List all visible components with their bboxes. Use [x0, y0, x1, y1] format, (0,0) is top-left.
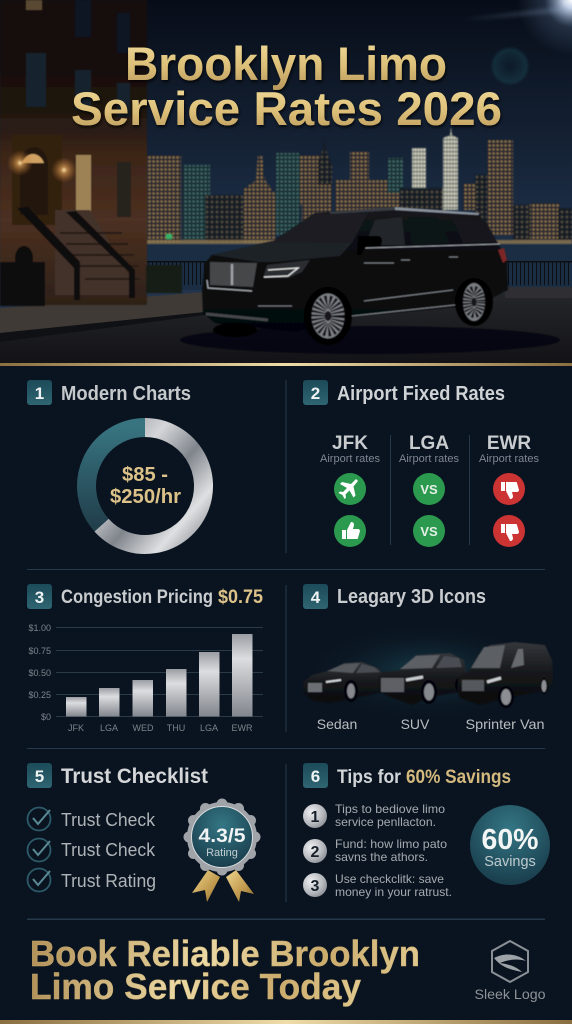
badge 1: 1: [35, 384, 44, 403]
icon: vs LGA bottom: [413, 515, 445, 547]
bar chart: THU: [167, 723, 185, 733]
rating rosette badge: Rating: [206, 847, 238, 859]
tip 3: Use checkclitk: save: [335, 872, 444, 886]
heading: Tips for: [337, 766, 401, 788]
panel 2: airport fixed rates: [303, 380, 539, 547]
icon: sprinter van: [457, 642, 553, 708]
badge 2: 2: [311, 384, 320, 403]
icon: vs LGA bottom: VS: [420, 524, 438, 539]
heading: Congestion Pricing: [61, 586, 213, 608]
panel 6: tips: [303, 763, 550, 899]
bar chart: $1.00: [28, 623, 51, 633]
bar chart: $0.75: [28, 646, 51, 656]
badge 4: [303, 584, 328, 609]
tip 3: money in your ratrust.: [335, 885, 452, 899]
badge 5: [27, 763, 52, 788]
badge 6: 6: [311, 767, 320, 786]
bottom gold bar: [0, 1020, 572, 1024]
heading: Airport Fixed Rates: [337, 383, 505, 405]
airport labels: Airport rates: [479, 453, 539, 465]
savings circle: Savings: [484, 854, 536, 870]
badge 3: 3: [35, 588, 44, 607]
checklist: [28, 808, 156, 892]
bar chart: JFK: [68, 723, 84, 733]
icon: thumbs up: [334, 515, 366, 547]
heading: Trust Checklist: [61, 765, 208, 788]
airport labels: LGA: [409, 433, 449, 454]
heading: [337, 766, 511, 788]
gold divider under hero: [0, 363, 572, 366]
airport labels: Airport rates: [320, 453, 380, 465]
vehicle labels: [317, 716, 544, 732]
donut chart: $250/hr: [110, 486, 181, 508]
panel 4: vehicle icons: [300, 584, 553, 732]
call to action: [30, 933, 420, 1007]
vehicle labels: Sprinter Van: [466, 716, 544, 732]
heading: Leagary 3D Icons: [337, 586, 486, 608]
tip 2: savns the athors.: [335, 850, 428, 864]
bar chart: [28, 623, 263, 733]
panel 5: trust checklist: [27, 763, 260, 902]
donut chart: $85 -: [122, 464, 168, 486]
icon: SUV: [378, 653, 468, 705]
tip 1: [303, 802, 445, 829]
airport labels: Airport rates: [399, 453, 459, 465]
tip 2: [303, 837, 447, 864]
title: Brooklyn Limo: [125, 37, 447, 90]
savings circle: [470, 805, 550, 885]
checklist: Trust Check: [61, 810, 156, 830]
badge 5: 5: [35, 767, 44, 786]
bar chart: LGA: [200, 723, 218, 733]
badge 1: [27, 380, 52, 405]
donut chart: [87, 427, 204, 544]
call to action: Book Reliable Brooklyn: [30, 933, 420, 974]
bar chart: WED: [132, 723, 154, 733]
panel 3: congestion pricing: [27, 584, 263, 733]
tip 2: 2: [311, 844, 320, 861]
brownstone building: [0, 0, 182, 306]
hero photo: Brooklyn street at night with limo: [0, 0, 572, 364]
badge 6: [303, 763, 328, 788]
icon: vs LGA top: [413, 473, 445, 505]
panel 1: modern charts: [27, 380, 204, 544]
airport labels: EWR: [487, 433, 531, 454]
rating rosette badge: [184, 798, 260, 902]
tip 3: [303, 872, 452, 899]
savings circle: 60%: [482, 824, 539, 856]
heading: 60% Savings: [406, 766, 511, 788]
bar chart: LGA: [100, 723, 118, 733]
icon: plane: [334, 473, 366, 505]
tip 3: 3: [311, 878, 320, 895]
limo SUV: [180, 207, 560, 354]
call to action: Limo Service Today: [30, 966, 361, 1007]
badge 2: [303, 380, 328, 405]
airport labels: JFK: [332, 433, 368, 454]
icon: vs LGA top: VS: [420, 482, 438, 497]
vehicle labels: Sedan: [317, 716, 357, 732]
icon: thumbs down top: [493, 473, 525, 505]
sidewalk and road: [0, 293, 572, 364]
heading: Modern Charts: [61, 383, 191, 405]
water: [146, 245, 572, 290]
icon: sedan: [303, 662, 385, 703]
tip 1: Tips to bediove limo: [335, 802, 445, 816]
badge 4: 4: [311, 588, 321, 607]
logo: Sleek Logo: [474, 986, 546, 1002]
skyline: [146, 127, 572, 244]
checklist: Trust Rating: [61, 871, 156, 891]
tip 1: 1: [311, 809, 320, 826]
heading: $0.75: [218, 586, 263, 608]
badge 3: [27, 584, 52, 609]
checklist: Trust Check: [61, 840, 156, 860]
fence: [146, 262, 572, 285]
icon: thumbs down bottom: [493, 515, 525, 547]
title: [71, 37, 502, 135]
vehicle labels: SUV: [401, 716, 430, 732]
bar chart: EWR: [232, 723, 253, 733]
tip 2: Fund: how limo pato: [335, 837, 447, 851]
bar chart: $0.50: [28, 668, 51, 678]
bar chart: $0.25: [28, 690, 51, 700]
tip 1: service penllacton.: [335, 815, 436, 829]
bar chart: $0: [41, 712, 51, 722]
rating rosette badge: 4.3/5: [198, 826, 246, 847]
logo: [474, 941, 546, 1002]
title: Service Rates 2026: [71, 82, 502, 135]
airport labels: [320, 433, 539, 465]
